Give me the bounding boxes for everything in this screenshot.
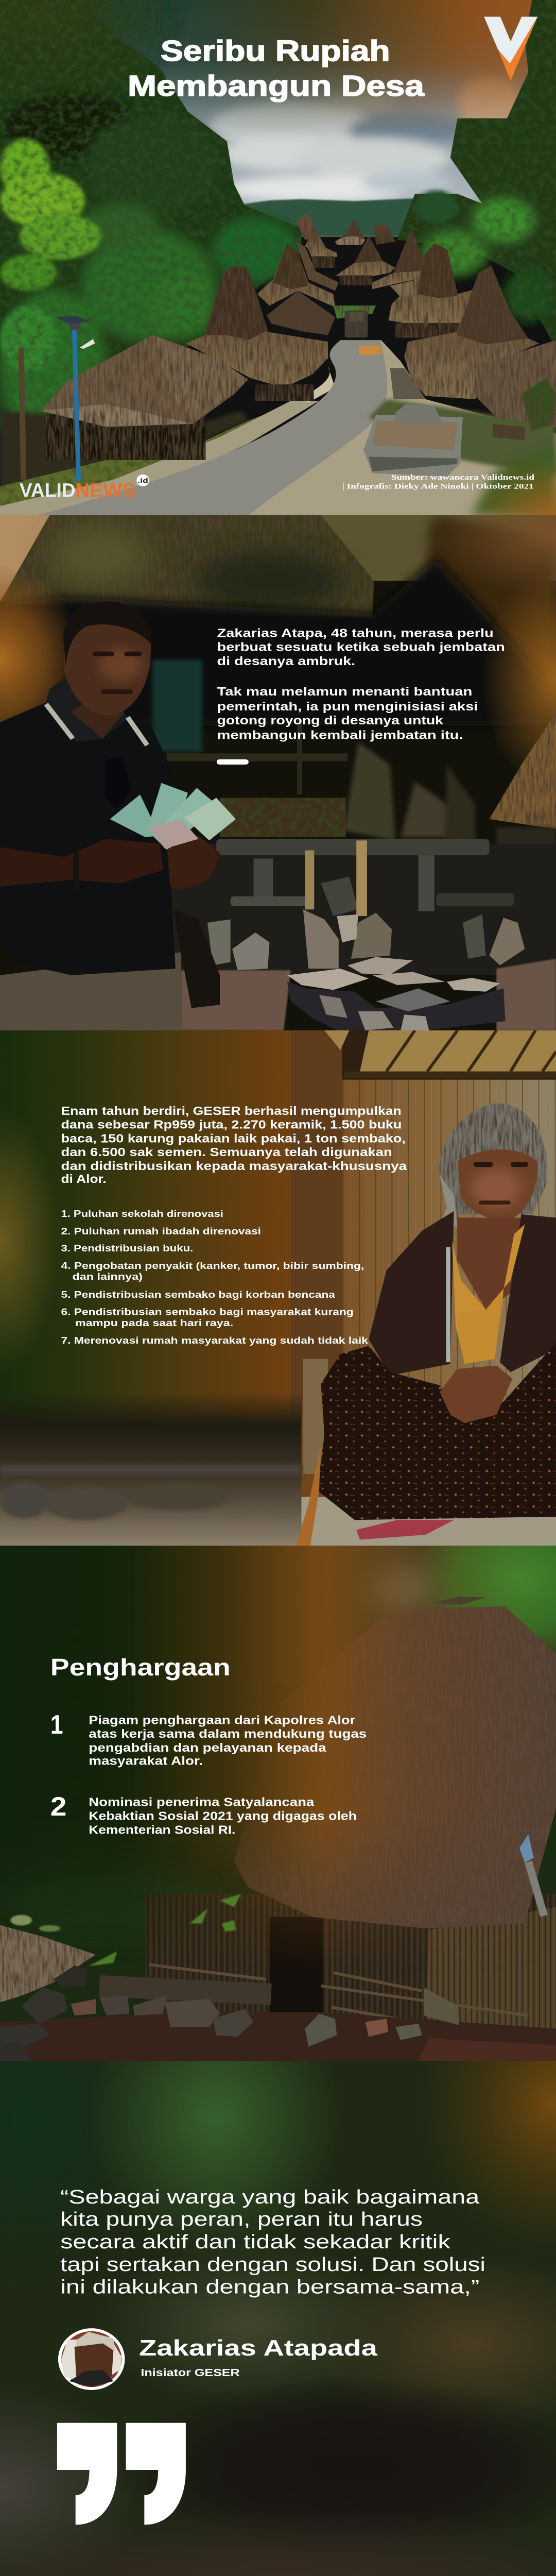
text: numbered achievements list: 6. Pendistribusian sembako bagi masyarakat kurang xyxy=(61,1307,354,1317)
photo: pavement and road xyxy=(0,340,556,515)
quote text xyxy=(60,2187,485,2298)
text: intro paragraphs: gotong royong di desanya untuk xyxy=(217,714,444,727)
panel: GESER achievements xyxy=(0,1030,556,1546)
award 2: Kementerian Sosial RI. xyxy=(89,1823,235,1837)
text: fundraising paragraph: dan didistribusikan kepada masyarakat-khususnya xyxy=(61,1160,407,1173)
panel: awards xyxy=(0,1546,556,2061)
rupiah notes xyxy=(110,783,236,850)
arms xyxy=(0,839,163,887)
text: intro paragraphs: Zakarias Atapa, 48 tahun, merasa perlu xyxy=(217,626,494,640)
photo: tree trunk xyxy=(18,348,26,480)
text: intro paragraphs: di desanya ambruk. xyxy=(217,655,355,668)
photo: gradient wall background xyxy=(0,1030,556,1546)
icon: large closing quotation marks xyxy=(57,2423,186,2525)
skirt xyxy=(317,1343,556,1520)
source credit: Sumber: wawancara Validnews.id xyxy=(391,473,535,482)
text: fundraising paragraph xyxy=(61,1105,407,1186)
jacket xyxy=(369,1211,556,1376)
heading: Penghargaan: Penghargaan xyxy=(50,1655,231,1681)
photo: stone tables xyxy=(170,839,556,975)
photo: left tree canopy xyxy=(0,0,301,447)
text: fundraising paragraph: dana sebesar Rp959 juta, 2.270 keramik, 1.500 buku xyxy=(61,1118,402,1131)
photo: large thatched roof xyxy=(234,1597,556,1928)
photo: stone tomb xyxy=(363,404,463,477)
sunglasses on shirt xyxy=(105,757,131,809)
source credit: | Infografis: Dieky Ade Ninoki | Oktober 2021 xyxy=(342,482,534,490)
bag xyxy=(174,909,220,1008)
title xyxy=(128,35,424,103)
text: fundraising paragraph: Enam tahun berdiri, GESER berhasil mengumpulkan xyxy=(61,1105,402,1118)
photo: foliage leaves xyxy=(11,1894,241,1966)
text: numbered achievements list: 7. Merenovasi rumah masyarakat yang sudah tidak laik xyxy=(61,1335,368,1346)
photo: background hut and overlay xyxy=(0,515,556,1030)
panel: quote xyxy=(0,2061,556,2576)
panel: cover village photo xyxy=(0,0,556,515)
foot and sandal xyxy=(356,1520,454,1540)
text: numbered achievements list: 2. Puluhan rumah ibadah direnovasi xyxy=(61,1227,261,1237)
photo: forest background xyxy=(0,1546,556,2061)
face xyxy=(458,1149,537,1220)
quote text: tapi sertakan dengan solusi. Dan solusi xyxy=(60,2254,485,2276)
text: fundraising paragraph: dan 6.500 sak semen. Semuanya telah digunakan xyxy=(61,1146,392,1159)
icon: V logo xyxy=(484,17,537,80)
photo: lamp post with solar panel xyxy=(55,316,95,481)
photo: flat stone pile xyxy=(287,957,506,1030)
text: intro paragraphs: membangun kembali jembatan itu. xyxy=(217,728,463,742)
photo: bamboo roof slats xyxy=(324,1030,556,1080)
neck and collar xyxy=(44,676,128,742)
photo: large huts left xyxy=(41,266,328,460)
logo: Validnews xyxy=(20,474,149,501)
photo: warm gradient overlay xyxy=(0,1546,556,1973)
photo: dirt ground xyxy=(181,959,556,1030)
logo: Validnews: .id xyxy=(137,477,148,485)
text: intro paragraphs: pemerintah, ia pun menginisiasi aksi xyxy=(217,700,478,714)
title: Seribu Rupiah xyxy=(161,35,390,67)
text: intro paragraphs: Tak mau melamun menanti bantuan xyxy=(217,685,472,699)
award 1: masyarakat Alor. xyxy=(89,1754,203,1768)
panel: Zakarias portrait story xyxy=(0,515,556,1030)
photo: small thatch left xyxy=(0,1925,96,2002)
photo: bamboo hut wall xyxy=(99,1894,556,2035)
neck xyxy=(458,1218,521,1310)
text: numbered achievements list xyxy=(61,1209,368,1346)
head xyxy=(63,601,151,716)
text: fundraising paragraph: di Alor. xyxy=(61,1173,107,1186)
photo: large huts right xyxy=(404,265,556,440)
award 1: 1 xyxy=(50,1709,63,1739)
award 2 xyxy=(50,1791,357,1837)
photo: right tree canopy xyxy=(397,0,556,348)
quote text: ini dilakukan dengan bersama-sama,” xyxy=(60,2277,479,2298)
attribution: Zakarias Atapada xyxy=(139,2335,378,2361)
photo: distant hills xyxy=(234,198,472,236)
text: numbered achievements list: 1. Puluhan sekolah direnovasi xyxy=(61,1209,223,1219)
figure: man holding rupiah notes xyxy=(0,601,236,1030)
award 1: Piagam penghargaan dari Kapolres Alor xyxy=(89,1714,355,1727)
photo: ground left under huts xyxy=(0,411,248,489)
photo: rocks and ground xyxy=(0,1965,556,2061)
avatar: Zakarias xyxy=(58,2328,125,2390)
logo: Validnews: NEWS xyxy=(75,480,135,501)
photo: standing stones and wall xyxy=(220,742,556,923)
hands xyxy=(440,1366,512,1423)
quote text: secara aktif dan tidak sekadar kritik xyxy=(60,2231,450,2253)
award 2: 2 xyxy=(50,1791,66,1822)
text: intro paragraphs: berbuat sesuatu ketika sebuah jembatan xyxy=(217,640,505,654)
walking stick xyxy=(296,1445,321,1546)
award 1: pengabdian dan pelayanan kepada xyxy=(89,1741,327,1755)
text: numbered achievements list: 4. Pengobatan penyakit (kanker, tumor, bibir sumbing, xyxy=(61,1261,364,1272)
scarf and shirt xyxy=(452,1224,525,1362)
trousers xyxy=(0,952,183,1030)
accent bar xyxy=(217,759,249,765)
hair xyxy=(440,1104,547,1214)
photo: stone floor xyxy=(0,1392,556,1546)
award 2: Nominasi penerima Satyalancana xyxy=(89,1796,315,1809)
attribution: Inisiator GESER xyxy=(141,2367,240,2379)
logo: Validnews: VALID xyxy=(20,480,76,501)
text: numbered achievements list: 5. Pendistribusian sembako bagi korban bencana xyxy=(61,1290,335,1300)
quote text: kita punya peran, peran itu harus xyxy=(60,2209,423,2230)
photo: grassy slope left xyxy=(0,408,284,513)
photo: sky and clouds xyxy=(75,0,532,237)
text: numbered achievements list: 3. Pendistribusian buku. xyxy=(61,1244,193,1254)
figure: elderly woman xyxy=(296,1104,556,1546)
title: Membangun Desa xyxy=(128,70,424,103)
award 1 xyxy=(50,1709,367,1768)
shirt xyxy=(0,680,181,975)
photo: background village huts xyxy=(257,214,475,338)
text: numbered achievements list: mampu pada saat hari raya. xyxy=(75,1318,233,1329)
text: fundraising paragraph: baca, 150 karung pakaian laik pakai, 1 ton sembako, xyxy=(61,1132,406,1145)
text: numbered achievements list: dan lainnya) xyxy=(73,1272,143,1282)
quote text: “Sebagai warga yang baik bagaimana xyxy=(60,2187,479,2208)
text: intro paragraphs xyxy=(217,626,505,742)
award 2: Kebaktian Sosial 2021 yang digagas oleh xyxy=(89,1809,357,1823)
photo: bottom right foliage with warm tint xyxy=(0,0,556,515)
background: blended gradient blobs xyxy=(0,2061,556,2576)
photo: right thatched hut xyxy=(490,713,556,829)
source credit xyxy=(342,473,535,490)
attribution xyxy=(139,2335,378,2379)
award 1: atas kerja sama dalam mendukung tugas xyxy=(89,1727,367,1741)
